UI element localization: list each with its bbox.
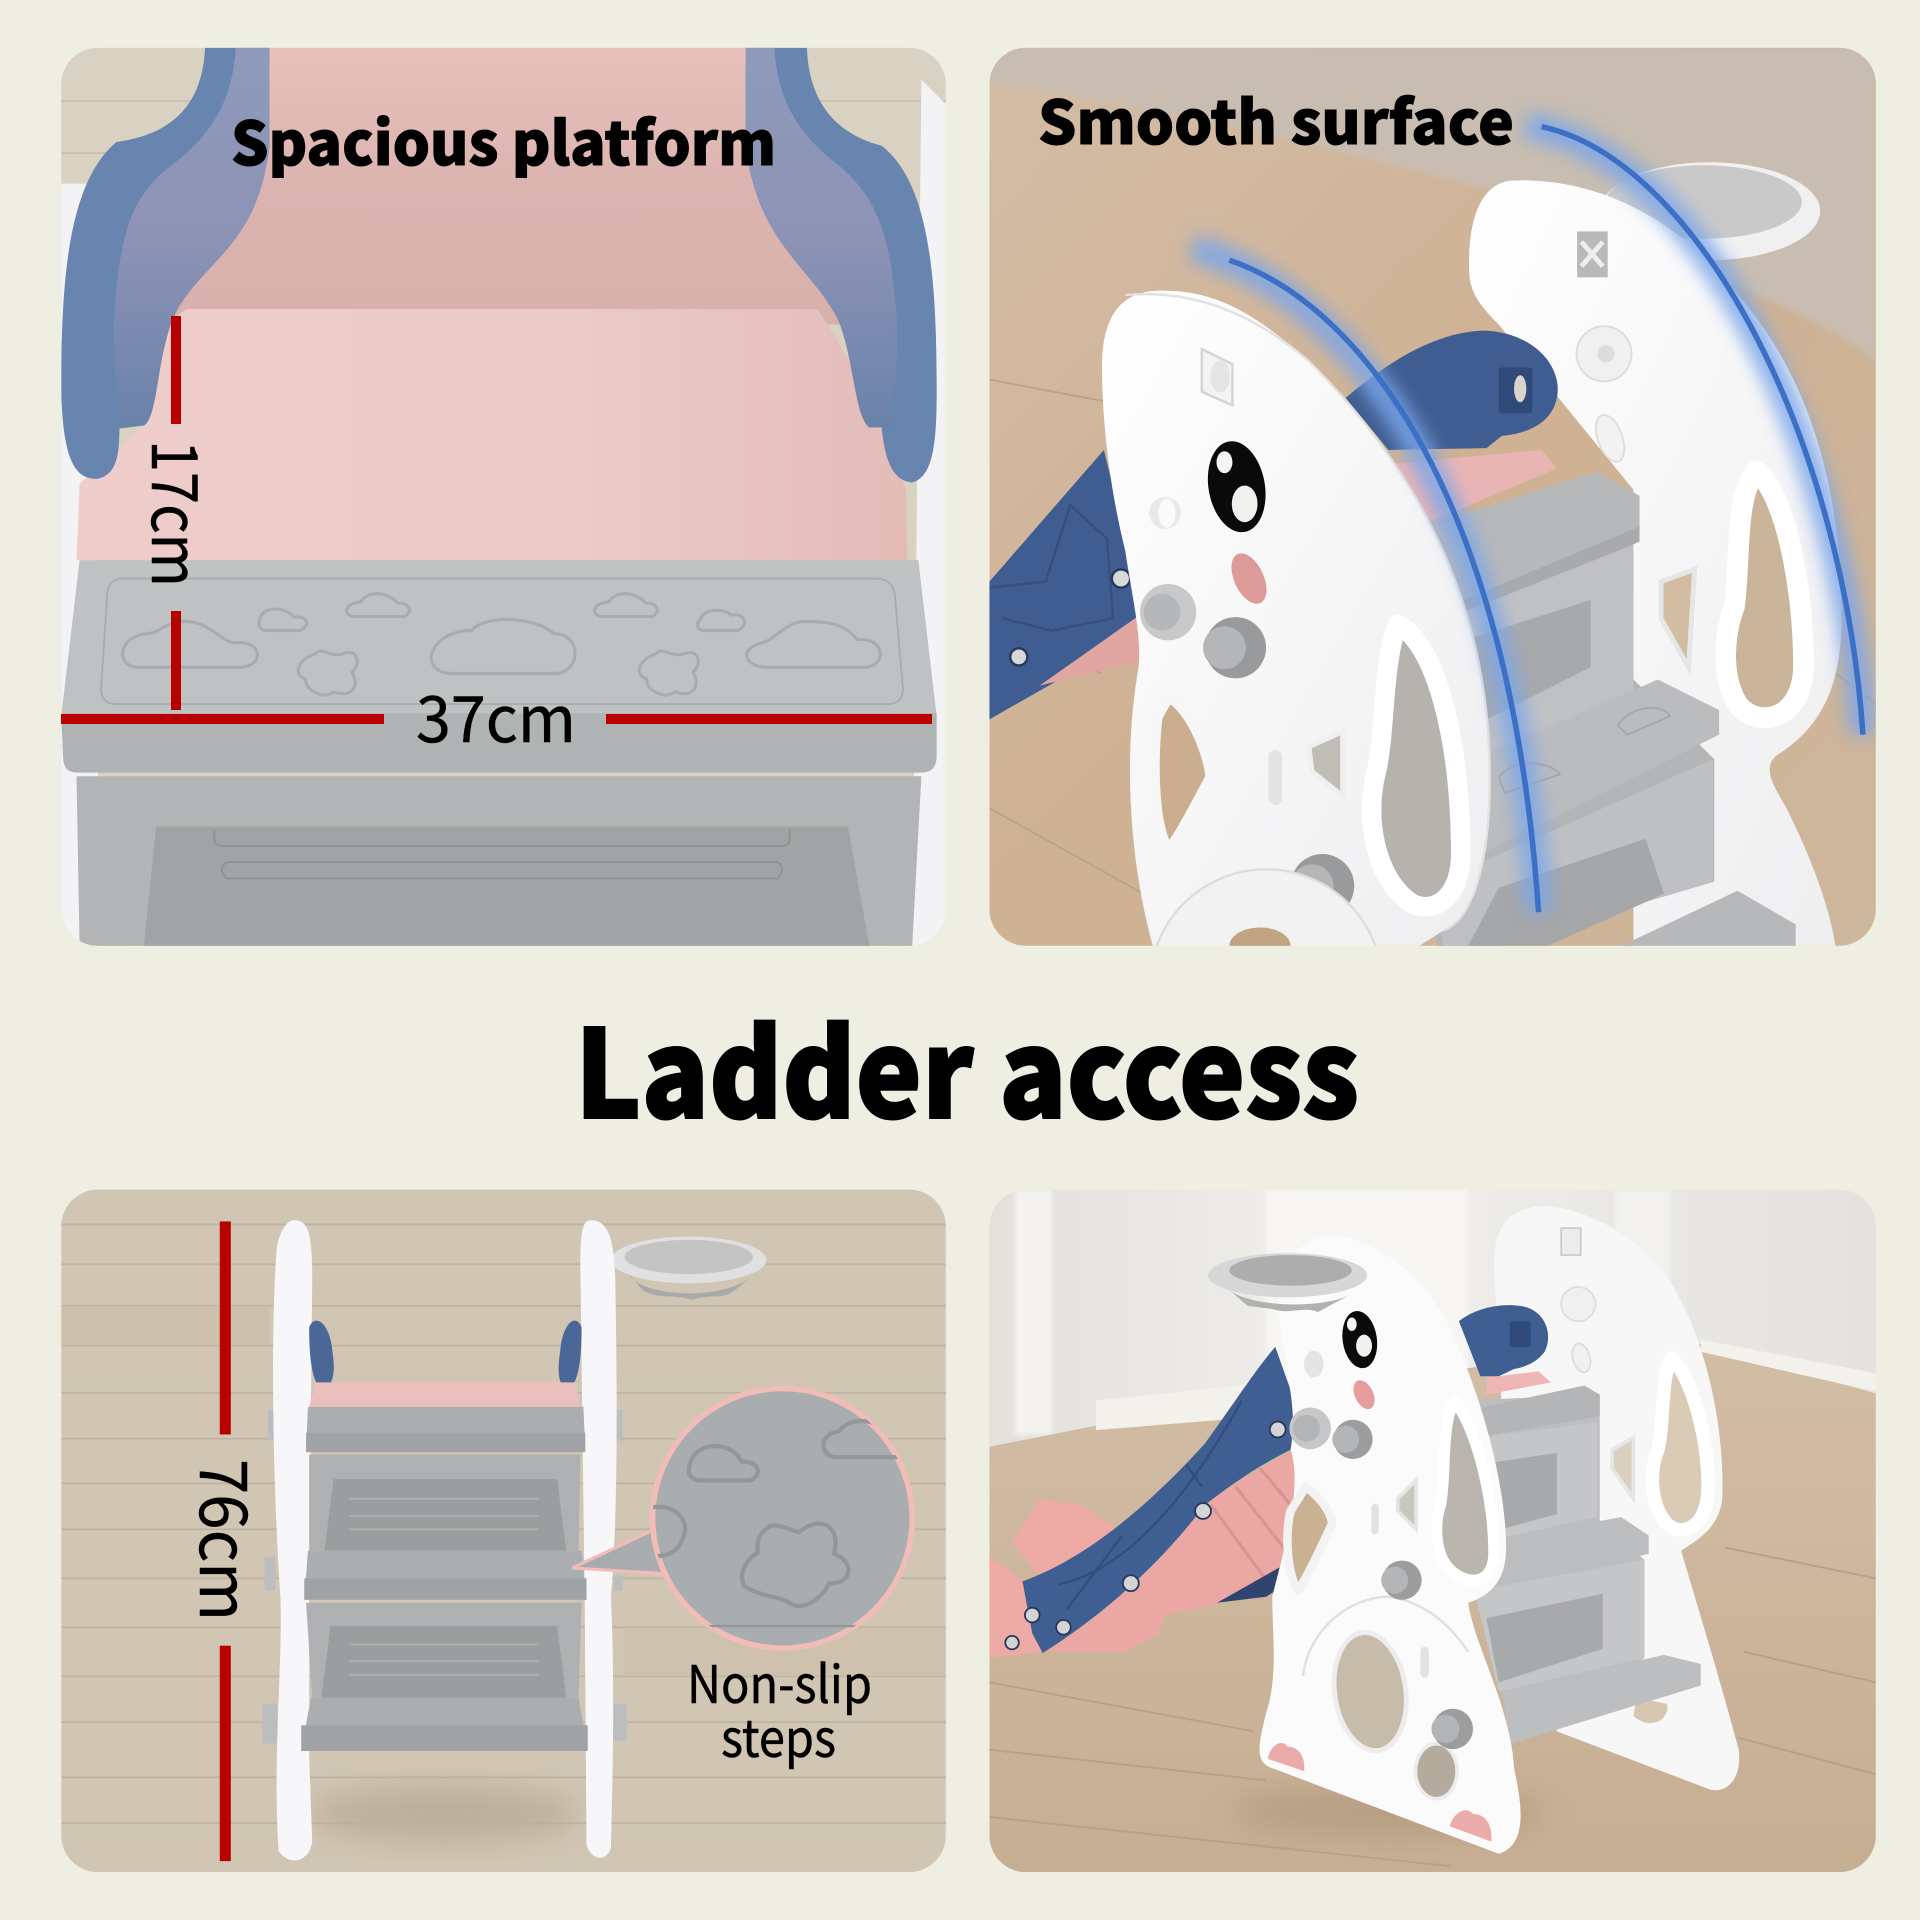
panel holes — [1287, 1351, 1494, 1799]
pink platform — [1396, 450, 1557, 522]
knobs — [1140, 584, 1354, 918]
dimension bars: top-left panel — [61, 316, 932, 724]
baseboards — [1096, 1340, 1876, 1430]
floor boards — [989, 1548, 1876, 1866]
blue handle — [1346, 331, 1558, 450]
back white panel — [1469, 180, 1842, 946]
steps backing — [1430, 520, 1714, 946]
floor shadow — [1229, 1786, 1548, 1835]
white side boards — [61, 80, 946, 946]
dimension bars — [220, 1221, 231, 1861]
blue slide surface — [1022, 1347, 1295, 1653]
step 2 — [1641, 680, 1720, 744]
label: 76cm dimension: 76cm — [180, 1459, 276, 1621]
magnifier pointer — [572, 1526, 670, 1574]
face: eye — [1208, 441, 1266, 532]
grey step front edge — [61, 713, 937, 773]
label: non-slip steps: steps — [721, 1697, 836, 1772]
recess 1 — [1456, 1422, 1597, 1548]
blue handles — [309, 1321, 582, 1389]
wall and curtains — [989, 1190, 1876, 1872]
face: eye — [1339, 1309, 1381, 1370]
step 1 — [1456, 1385, 1600, 1441]
floor shadow — [309, 1786, 579, 1842]
face: cheek — [1349, 1377, 1379, 1412]
grey recess frame — [77, 776, 921, 946]
label: 37cm dimension: 37cm — [416, 669, 576, 761]
blue rail left — [61, 48, 269, 479]
title: Ladder access — [575, 977, 1359, 1154]
label: non-slip steps: Non-slip — [687, 1643, 872, 1718]
recess 2 — [1431, 759, 1713, 946]
label: smooth surface: Smooth surface — [1038, 75, 1514, 162]
pink slide upper section — [162, 48, 857, 324]
recess 1 — [1467, 545, 1634, 752]
label: non-slip steps — [687, 1643, 872, 1772]
step 2 — [304, 1551, 586, 1600]
front white panel — [1260, 1235, 1521, 1854]
blue handle — [1459, 1305, 1548, 1376]
left knobs — [263, 1410, 277, 1744]
floor planks — [61, 1224, 946, 1823]
step 1 — [306, 1407, 585, 1450]
step 3 — [301, 1698, 588, 1750]
right white rail — [580, 1220, 617, 1858]
panel rim — [1125, 294, 1490, 931]
label: 17cm dimension: 17cm — [133, 440, 225, 587]
pink slide underside — [1046, 1450, 1335, 1652]
step 3 — [1502, 1655, 1701, 1744]
recess 2 — [306, 1603, 582, 1698]
pink platform — [309, 1382, 580, 1407]
panel fittings — [1149, 349, 1232, 529]
magnifier circle — [637, 1389, 918, 1648]
label: spacious platform: Spacious platform — [231, 96, 776, 183]
back panel details — [1561, 1228, 1708, 1723]
left white rail — [273, 1220, 312, 1860]
slide bolts — [1010, 569, 1130, 665]
right knobs — [612, 1410, 627, 1741]
knobs — [1289, 1408, 1473, 1749]
step outline and non-slip clouds — [101, 579, 903, 704]
basket — [611, 1237, 766, 1300]
basket — [1208, 1253, 1367, 1312]
panel: smooth surface — [989, 48, 1876, 946]
floor — [989, 48, 1876, 946]
step 1 — [1452, 472, 1640, 529]
floor — [989, 1343, 1876, 1872]
face: cheek — [1231, 553, 1266, 604]
pink slide lower section — [77, 309, 907, 560]
panel: spacious platform — [61, 48, 946, 946]
wall — [989, 48, 1876, 361]
back panel details — [1576, 231, 1804, 718]
grey step top — [61, 560, 937, 716]
motion arcs — [1229, 127, 1863, 912]
blue rail right — [746, 48, 937, 482]
step 2 — [1456, 1517, 1649, 1591]
step 3 — [1621, 891, 1796, 946]
steps backing — [1456, 1395, 1644, 1744]
pink slide underside — [1040, 618, 1139, 686]
pink platform — [1486, 1371, 1551, 1395]
basket ring behind — [1600, 162, 1820, 260]
pink slide foot — [989, 1499, 1134, 1658]
panel: slide three-quarter view — [989, 1190, 1876, 1872]
blue slide — [989, 450, 1144, 719]
recess 1 — [309, 1455, 580, 1551]
grey recess inner — [144, 826, 869, 946]
panel: ladder front view with magnifier — [61, 1190, 946, 1872]
pink feet marks — [1268, 1743, 1492, 1842]
back white panel — [1494, 1206, 1739, 1790]
slide bolts — [1005, 1422, 1286, 1649]
panel holes — [1156, 615, 1470, 946]
motion arc halos — [1193, 126, 1863, 912]
front white panel — [1102, 291, 1490, 946]
recess 2 — [1474, 1560, 1644, 1692]
